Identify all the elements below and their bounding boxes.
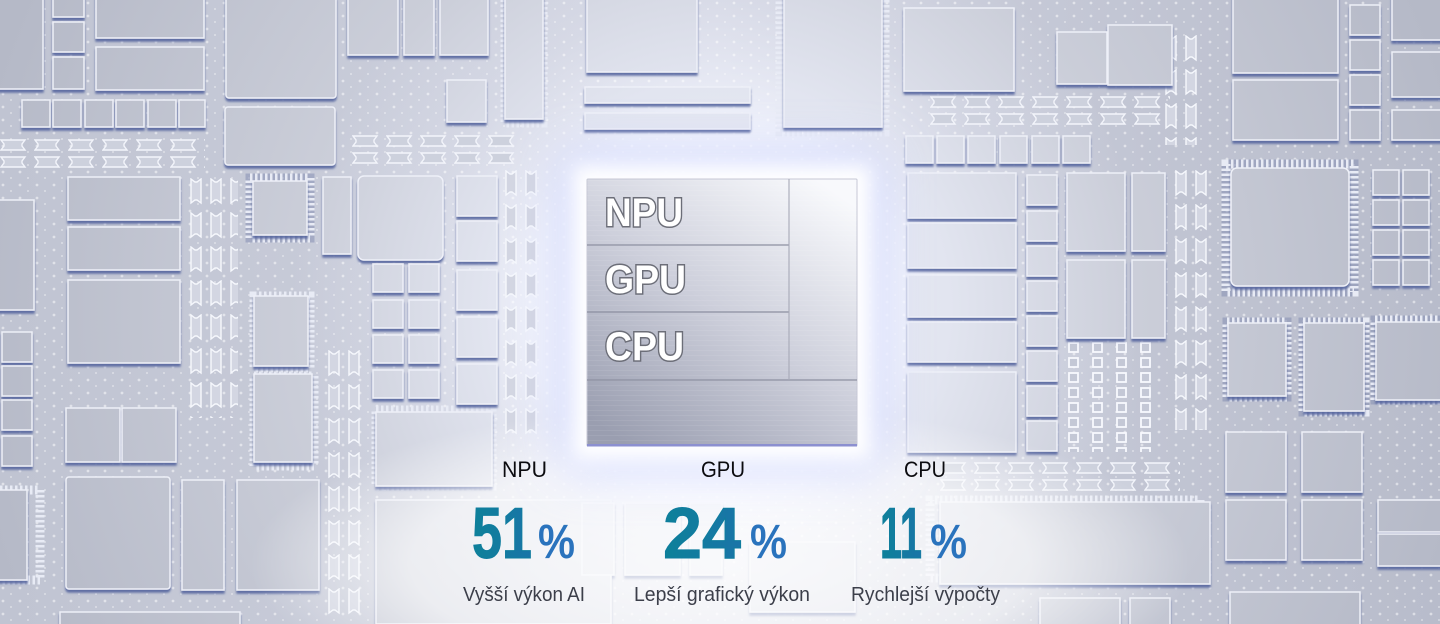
small capacitor rows [0,35,1215,620]
chip label: NPU: NPU [605,191,683,235]
chip label: CPU: CPU [605,325,684,369]
heading: CPU: CPU [904,457,946,482]
heading: GPU: GPU [701,457,745,482]
processor chip [560,152,884,473]
electronic components: bottom centre [376,500,1210,624]
stat: NPU [463,457,585,606]
electronic components: right side [906,0,1440,624]
percent sign: % [930,516,967,569]
value: 51%: 51 [472,494,532,574]
chip body [587,179,857,446]
electronic components: left side [0,0,497,624]
electronic components: top centre [505,0,1014,129]
pin shadows of integrated circuits [250,164,1440,412]
bottom white fade behind text [0,400,1440,624]
value: 24%: 24 [663,494,741,574]
percent sign: % [538,516,575,569]
caption: Lepší grafický výkon [634,584,810,606]
percent sign: % [750,516,787,569]
caption: Rychlejší výpočty [851,584,1000,606]
chip label: GPU: GPU [605,258,686,302]
caption: Vyšší výkon AI [463,584,585,606]
stat: GPU [634,457,810,606]
value: 11%: 11 [880,494,922,574]
stat: CPU [851,457,1000,606]
heading: NPU: NPU [502,457,547,482]
